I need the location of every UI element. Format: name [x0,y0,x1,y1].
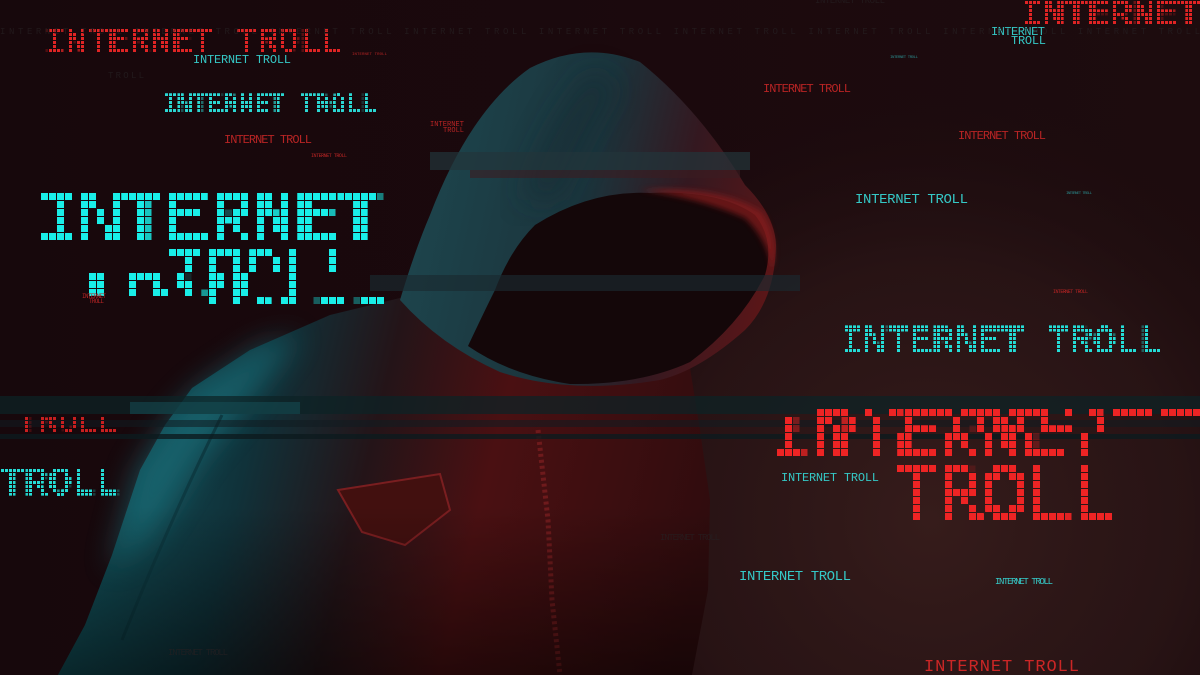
small cyan labels: INTERNET TROLL [781,471,879,485]
small cyan labels [193,25,1053,587]
medium pixel labels: INTERNET TROLL [162,90,376,120]
left shoulder highlight [110,335,300,570]
small red labels [82,53,1088,675]
small cyan labels: INTERNET TROLL [193,53,291,67]
small red labels: INTERNET TROLL [352,53,388,57]
medium pixel labels: INTERNET TROLL [44,24,342,62]
small red labels: INTERNET TROLL [958,129,1046,143]
large red INTERNET glitched: INTERNET [806,395,1200,481]
small red labels: INTERNET [82,293,106,300]
faint teal tiny labels: INTERNET TROLL [890,56,919,60]
large cyan INTERNET: INTERNET [36,178,382,264]
hood opening shadow [468,193,768,384]
medium pixel labels: INTERNET TROLL [840,321,1162,364]
faint teal tiny labels [890,56,1093,196]
large red INTERNET glitched: INTERNET [770,395,1120,481]
small cyan labels: TROLL [1011,34,1046,48]
glitched cyan TROLL: TROLL [70,237,330,323]
large red TROLL: TROLL [893,455,1117,541]
hood [400,52,776,386]
small cyan labels: INTERNET TROLL [995,577,1053,587]
small cyan labels: INTERNET TROLL [739,569,851,585]
hood crease shadow [520,70,620,200]
faint dark labels: TROLL [108,71,144,81]
figure body [58,298,710,675]
glitched cyan TROLL: TROLL [166,237,361,323]
faint teal tiny labels: INTERNET TROLL [1066,192,1093,196]
small red labels: INTERNET TROLL [763,82,851,96]
jacket zipper [538,430,560,675]
glitched cyan TROLL: TROLL [190,239,390,325]
large red INTERNET glitched [777,409,1200,456]
jacket seam [122,415,222,640]
small red labels: INTERNET [430,121,464,129]
glitched cyan TROLL [89,249,384,304]
medium pixel labels [0,0,1200,506]
large red INTERNET glitched: INTERNET [768,395,1108,481]
small red labels: INTERNET TROLL [1053,289,1088,295]
glitch bands [0,152,1200,439]
small red labels: TROLL [443,127,464,135]
small red labels: INTERNET TROLL [224,133,312,147]
medium pixel labels: TROLL [18,404,118,442]
small cyan labels: INTERNET [991,25,1045,39]
medium pixel labels: TROLL [0,463,120,506]
small red labels: INTERNET TROLL [311,153,347,159]
hooded figure [58,52,776,675]
faint dark labels: INTERNET TROLL INTERNET TROLL INTERNET TROLL INTERNET TROLL INTERNET TROLL INTERNET TROLL INTERNET TROLL INTERNET TROLL INTERNET TROLL [0,27,1200,37]
hood red rim [640,189,774,270]
faint dark labels: INTERNET TROLL [660,533,720,543]
small red labels: TROLL [89,298,104,305]
jacket pocket [338,474,450,545]
small cyan labels: INTERNET TROLL [855,192,968,208]
faint dark labels: INTERNET TROLL [168,648,228,658]
lower shading [58,298,710,675]
